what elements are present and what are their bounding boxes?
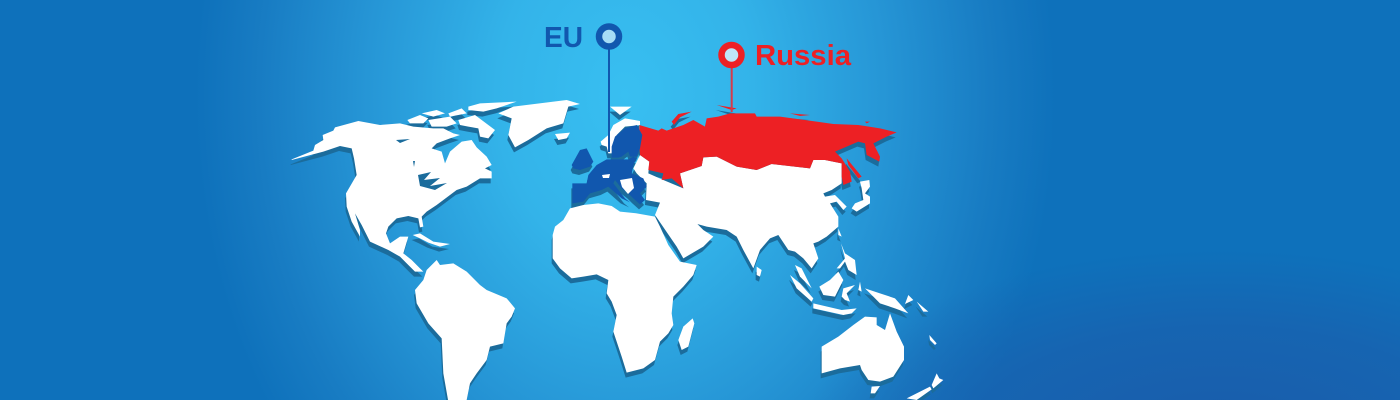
map shadow [291, 105, 942, 400]
world map: white land [292, 100, 943, 400]
Russia pin [722, 45, 742, 112]
EU label: EU [544, 22, 583, 54]
Russia label: Russia [755, 40, 852, 72]
EU pin [599, 26, 619, 152]
region: European Union [572, 125, 647, 204]
region: Russia [639, 105, 897, 188]
